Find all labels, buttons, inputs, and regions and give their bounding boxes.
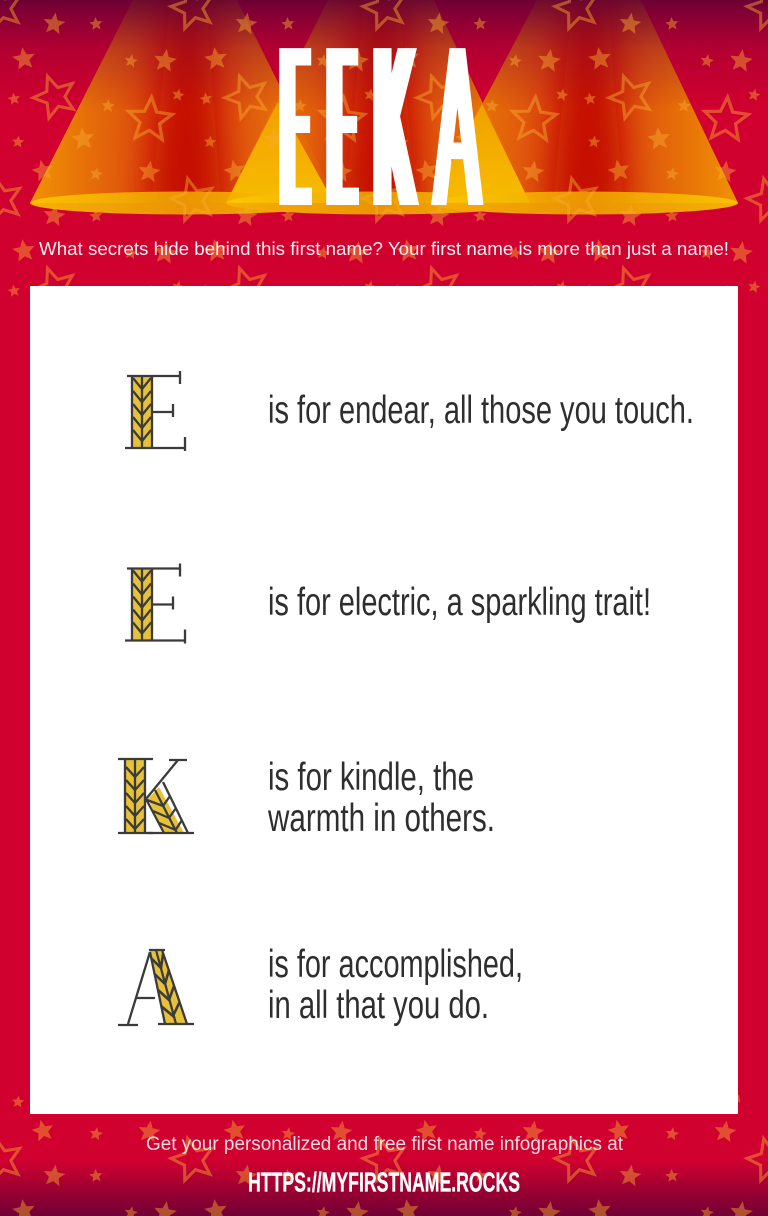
icon: letter A (118, 950, 194, 1025)
text: A lines (268, 943, 523, 1027)
icon: letter E (125, 371, 185, 451)
bottom star pattern (0, 1095, 768, 1216)
top star pattern (0, 0, 768, 298)
title: K (375, 0, 413, 254)
icon: letter E second (125, 564, 185, 644)
panel: white content (30, 286, 738, 1114)
title (283, 0, 479, 254)
footer prompt: Get your personalized and free first name infographics at (146, 1134, 624, 1155)
middle spotlight (232, 0, 483, 202)
text: A lines: in all that you do. (268, 984, 489, 1027)
footer url: HTTPS://MYFIRSTNAME.ROCKS (248, 1166, 520, 1198)
bottom shade (0, 1160, 768, 1216)
top shade (0, 0, 768, 110)
text: K lines: warmth in others. (267, 797, 495, 840)
right spotlight (482, 0, 738, 203)
text: A lines: is for accomplished, (268, 943, 523, 986)
spotlight bases (30, 192, 738, 214)
icon: letter K (118, 759, 194, 833)
left spotlight (30, 0, 280, 203)
spotlight cones (30, 0, 738, 215)
subtitle: What secrets hide behind this first name? Your first name is more than just a name! (39, 238, 729, 259)
title: A (436, 0, 479, 254)
text: K lines: is for kindle, the (268, 756, 474, 799)
overlap highlights (226, 102, 530, 203)
text: K lines (267, 756, 495, 840)
title: E (330, 0, 354, 254)
title: E (283, 0, 307, 254)
